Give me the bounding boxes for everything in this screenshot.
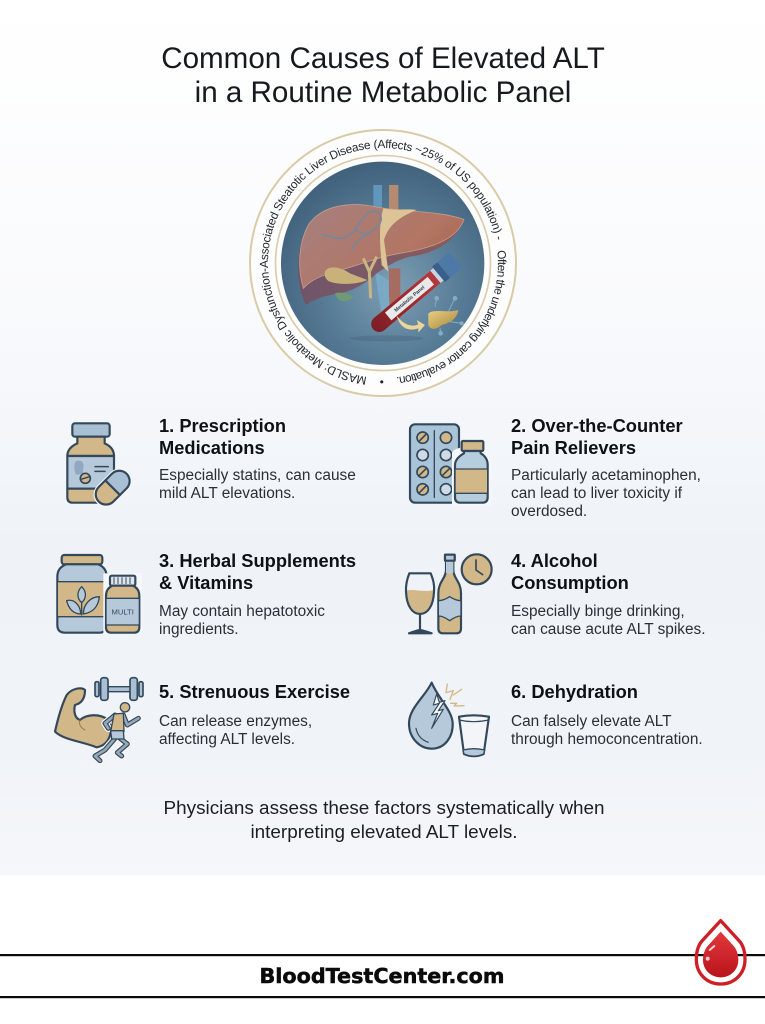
- test tube: Metabolic Panel: [393, 284, 427, 314]
- heading: 1. Prescription: [159, 415, 286, 436]
- heading: 5. Strenuous Exercise: [159, 681, 350, 702]
- title: Common Causes of Elevated ALT: [161, 42, 605, 75]
- closing statement: [164, 798, 604, 843]
- heading: 2. Over-the-Counter: [511, 415, 683, 436]
- cause 6: dehydration: [409, 681, 703, 756]
- liver illustration: [281, 162, 484, 365]
- cause 5: strenuous exercise: [55, 678, 350, 761]
- icon: blood drop logo: [696, 921, 745, 984]
- central badge: liver illustration with circular text: [249, 129, 517, 397]
- description: Especially binge drinking,: [511, 603, 685, 620]
- circular caption: •: [380, 380, 384, 384]
- title: [161, 42, 605, 109]
- cause 2: over-the-counter pain relievers: [410, 415, 701, 520]
- runner figure: [95, 703, 138, 761]
- circular caption: Often the underlying cantor evaluation.: [397, 250, 506, 383]
- closing statement: interpreting elevated ALT levels.: [250, 822, 518, 843]
- description: Particularly acetaminophen,: [511, 467, 701, 484]
- description: Can falsely elevate ALT: [511, 713, 672, 730]
- description: Especially statins, can cause: [159, 467, 356, 484]
- description: affecting ALT levels.: [159, 731, 295, 748]
- description: can lead to liver toxicity if: [511, 485, 683, 502]
- description: ingredients.: [159, 621, 239, 638]
- description: overdosed.: [511, 503, 587, 520]
- icon: wine glass, beer bottle and clock: [406, 554, 492, 633]
- description: mild ALT elevations.: [159, 485, 295, 502]
- icon: cracked water drop and glass: [409, 683, 489, 756]
- heading: & Vitamins: [159, 572, 253, 593]
- heading: Consumption: [511, 572, 629, 593]
- heading: Pain Relievers: [511, 437, 636, 458]
- description: can cause acute ALT spikes.: [511, 621, 706, 638]
- icon: supplement jar and multivitamin bottle: [57, 555, 142, 634]
- footer brand name: BloodTestCenter.com: [260, 964, 504, 988]
- icon: flexed arm, barbell and runner: [55, 678, 143, 761]
- cause 1: prescription medications: [67, 415, 356, 512]
- heading: Medications: [159, 437, 265, 458]
- heading: 3. Herbal Supplements: [159, 550, 356, 571]
- test tube: [367, 252, 462, 337]
- description: May contain hepatotoxic: [159, 603, 325, 620]
- closing statement: Physicians assess these factors systematically when: [164, 798, 604, 819]
- description: Can release enzymes,: [159, 713, 312, 730]
- heading: 6. Dehydration: [511, 681, 638, 702]
- title: in a Routine Metabolic Panel: [195, 76, 571, 109]
- circular caption: MASLD: Metabolic Dysfunction-Associated Steatotic Liver Disease (Affects ~25% of US population) -: [260, 140, 502, 385]
- icon: supplement jar and multivitamin bottle: MULTI: [111, 607, 134, 616]
- icon: pill bottle and capsule: [67, 423, 137, 512]
- description: through hemoconcentration.: [511, 731, 703, 748]
- icon: blister pack and bottle: [410, 424, 491, 506]
- heading: 4. Alcohol: [511, 550, 598, 571]
- cause 3: herbal supplements and vitamins: [57, 550, 356, 638]
- cause 4: alcohol consumption: [406, 550, 706, 638]
